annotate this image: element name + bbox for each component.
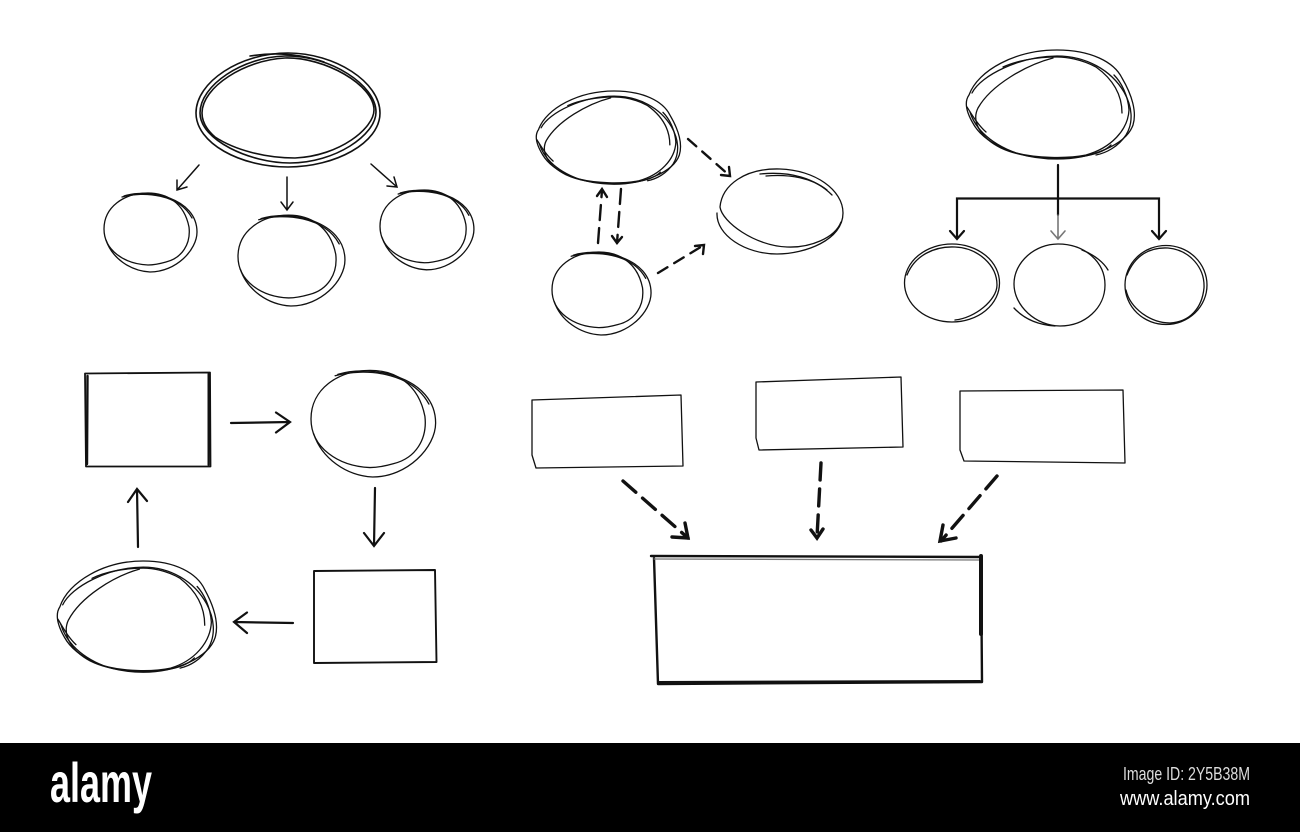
right box xyxy=(960,390,1125,463)
middle circle xyxy=(238,215,345,306)
arrow right xyxy=(231,412,290,432)
footer logo: alamy xyxy=(50,751,152,814)
dashed arrow: top ellipse down to bottom circle xyxy=(612,189,622,243)
right ellipse xyxy=(717,169,843,254)
big scribbled ellipse xyxy=(196,53,380,167)
footer bar xyxy=(0,743,1300,832)
arrow to middle circle xyxy=(281,177,293,210)
arrow to right circle xyxy=(371,164,397,187)
arrow up xyxy=(128,489,147,547)
bottom-left scribbled ellipse xyxy=(57,561,216,672)
dashed arrow from middle box xyxy=(811,463,823,538)
arrow down xyxy=(364,488,384,546)
top-left square xyxy=(85,372,210,466)
arrowhead: right branch xyxy=(1152,231,1166,239)
website: www.alamy.com xyxy=(1119,788,1250,810)
left circle xyxy=(904,244,1000,322)
right circle xyxy=(380,190,474,270)
middle circle xyxy=(1014,244,1108,326)
top-right circle xyxy=(311,370,436,477)
branching connector xyxy=(957,165,1159,238)
arrow to left circle xyxy=(177,165,199,190)
diagram: top-right ellipse with branching connector to circles xyxy=(904,50,1207,326)
top scribbled ellipse xyxy=(966,50,1134,159)
diagram: top-middle three nodes with dashed arrows xyxy=(536,91,843,335)
diagram: bottom-left cycle of squares and circles xyxy=(57,370,436,672)
middle box xyxy=(756,377,903,450)
arrowhead: left branch xyxy=(950,231,964,239)
arrow: middle branch xyxy=(1051,215,1065,239)
diagram: top-left ellipse with three arrows to circles xyxy=(104,53,474,306)
left circle xyxy=(104,193,197,272)
diagram: bottom-right three boxes converging on a large box xyxy=(532,377,1125,684)
dashed arrow from right box xyxy=(940,476,997,541)
left box xyxy=(532,395,683,468)
dashed arrow: bottom circle to right ellipse xyxy=(658,245,704,273)
dashed arrow from left box xyxy=(623,481,688,538)
bottom-right square xyxy=(314,570,436,663)
large box xyxy=(651,556,982,684)
right circle xyxy=(1125,246,1207,324)
arrow left xyxy=(234,612,293,633)
top-left scribbled ellipse xyxy=(536,91,680,184)
dashed arrow: top ellipse to right ellipse xyxy=(688,139,730,176)
bottom circle xyxy=(552,252,651,335)
dashed arrow: bottom circle up to top ellipse xyxy=(597,189,607,243)
image id: Image ID: 2Y5B38M xyxy=(1123,764,1250,784)
